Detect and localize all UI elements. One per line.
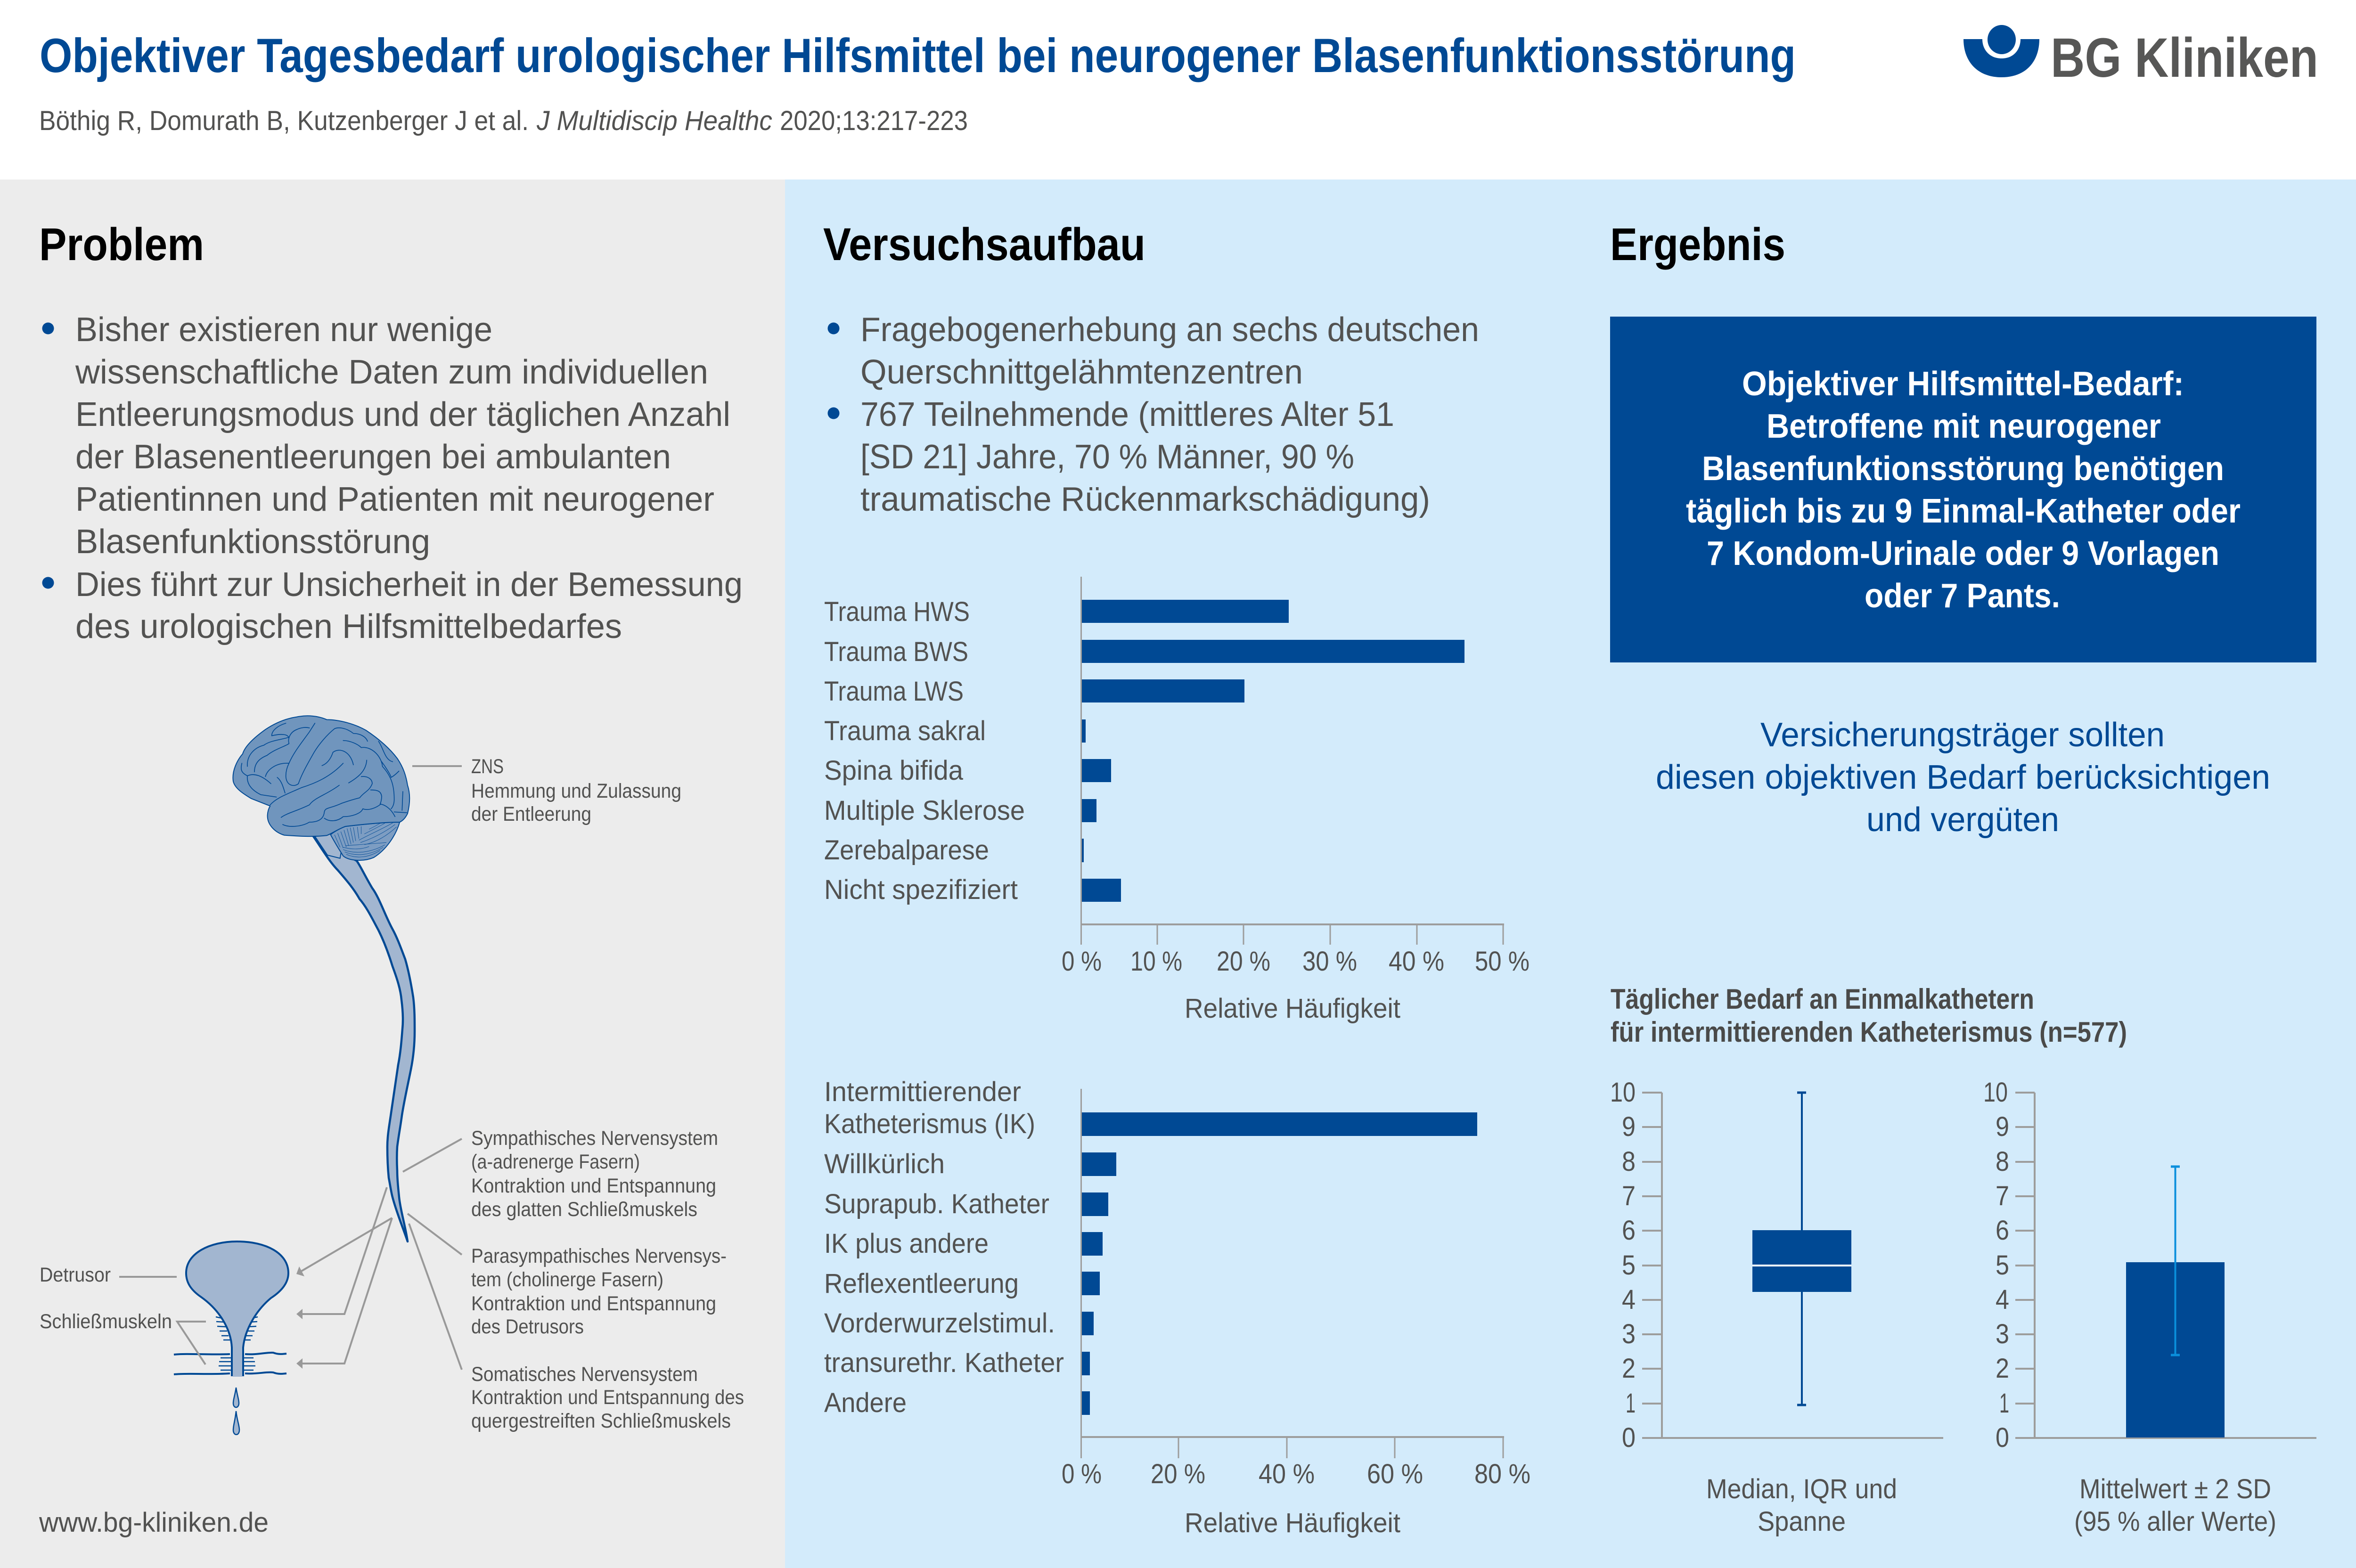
label: Schließmuskeln [40,1310,206,1364]
bar chart: emptying mode: 40 % [1259,1459,1315,1489]
box plot: median, IQR, range: 6 [1622,1215,1636,1246]
heading: Problem: Problem [39,219,204,270]
bar chart: cause: Zerebalparese [824,835,989,866]
bar chart: mean and SD: (95 % aller Werte) [2074,1506,2276,1537]
citation [39,106,968,136]
bullet text: problem: wissenschaftliche Daten zum individuellen [75,353,708,391]
label: Somatisches Nervensystem [409,1224,744,1432]
citation: J Multidiscip Healthc [536,106,772,136]
callout: result box: oder 7 Pants. [1865,577,2060,615]
label: Somatisches Nervensystem: Kontraktion und Entspannung des [471,1386,744,1409]
bar chart: cause: Multiple Sklerose [824,795,1025,826]
bar chart: emptying mode: Relative Häufigkeit [1185,1508,1400,1538]
bar chart: emptying mode: 20 % [1151,1459,1205,1489]
icon: drops [233,1388,239,1435]
bar chart: mean and SD: 9 [1996,1111,2009,1142]
label: Sympathisches Nervensystem: (a-adrenerge Fasern) [471,1151,640,1173]
logo: BG Kliniken [1963,25,2318,89]
recommendation text [1656,716,2270,839]
citation: Böthig R, Domurath B, Kutzenberger J et al. [39,106,529,136]
label: Parasympathisches Nervensystem: tem (cholinerge Fasern) [471,1268,663,1291]
label: Somatisches Nervensystem: quergestreiften Schließmuskels [471,1410,731,1432]
bar chart: emptying mode: IK plus andere [824,1228,989,1259]
label: Parasympathisches Nervensystem: Kontraktion und Entspannung [471,1292,716,1315]
bullet text: problem: Bisher existieren nur wenige [75,311,492,349]
bar chart: cause: 30 % [1302,946,1357,977]
box plot: median, IQR, range: 1 [1626,1388,1636,1419]
bullet text: setup: 767 Teilnehmende (mittleres Alter 51 [860,396,1394,433]
bar chart: mean and SD: 2 [1996,1353,2009,1384]
bar chart: cause: 50 % [1475,946,1530,977]
label: Schließmuskeln: Schließmuskeln [40,1310,172,1333]
bullet text: setup [827,311,1479,518]
box plot: median, IQR, range: 7 [1622,1181,1636,1211]
label: ZNS [412,755,681,825]
bar chart: mean and SD: 4 [1996,1284,2009,1315]
arrows: nerves to bladder [296,1187,392,1369]
bullet text: problem: Entleerungsmodus und der täglichen Anzahl [75,396,730,433]
label: Parasympathisches Nervensystem: des Detrusors [471,1315,584,1338]
icon: bladder [174,1241,288,1435]
bar chart: cause: Trauma HWS [824,596,970,627]
bar chart: cause: 40 % [1389,946,1444,977]
box plot: median, IQR, range: 0 [1622,1422,1636,1453]
box plot: median, IQR, range: Spanne [1758,1506,1846,1537]
bar chart: mean and SD: 1 [1999,1388,2009,1419]
box plot: median, IQR, range [1610,1077,1943,1537]
bar chart: emptying mode: Suprapub. Katheter [824,1189,1049,1219]
box plot: median, IQR, range: 10 [1610,1077,1636,1108]
label: Detrusor: Detrusor [40,1264,111,1286]
label: Sympathisches Nervensystem: Kontraktion und Entspannung [471,1175,716,1197]
bar chart: emptying mode: Intermittierender [824,1077,1021,1107]
bar chart: emptying mode: Reflexentleerung [824,1268,1019,1299]
bullet text: problem: der Blasenentleerungen bei ambulanten [75,438,671,476]
bullet text: problem: Patientinnen und Patienten mit neurogener [75,481,714,518]
bar chart: emptying mode: 0 % [1062,1459,1102,1489]
illustration: nervous system and bladder [40,716,744,1435]
box plot: median, IQR, range: 8 [1622,1146,1636,1177]
box plot: median, IQR, range: 3 [1622,1319,1636,1349]
label: Somatisches Nervensystem: Somatisches Nervensystem [471,1363,698,1386]
bar chart: mean and SD: 8 [1996,1146,2009,1177]
bullet text: setup: [SD 21] Jahre, 70 % Männer, 90 % [860,438,1354,476]
callout: result box: Blasenfunktionsstörung benötigen [1702,450,2224,488]
bar chart: cause [824,577,1530,1024]
bar chart: mean and SD: 6 [1996,1215,2009,1246]
label: ZNS: ZNS [471,755,504,778]
label: Sympathisches Nervensystem: des glatten Schließmuskels [471,1198,697,1221]
heading: Versuchsaufbau: Versuchsaufbau [823,219,1145,270]
recommendation text: diesen objektiven Bedarf berücksichtigen [1656,759,2270,796]
box plot: median, IQR, range: 5 [1622,1250,1636,1281]
recommendation text: und vergüten [1866,801,2059,839]
bar chart: mean and SD: 3 [1996,1319,2009,1349]
bar chart: emptying mode [824,1077,1530,1538]
bar chart: mean and SD: 0 [1996,1422,2009,1453]
chart title [1611,983,2127,1048]
callout: result box [1610,317,2316,662]
bar chart: mean and SD: 10 [1983,1077,2008,1108]
bullet text: problem: Blasenfunktionsstörung [75,523,430,561]
bar chart: emptying mode: 80 % [1474,1459,1530,1489]
website: www.bg-kliniken.de [39,1507,269,1538]
label: Sympathisches Nervensystem [403,1127,718,1221]
bullet text: setup: Fragebogenerhebung an sechs deutschen [860,311,1479,349]
bar chart: cause: Relative Häufigkeit [1185,993,1400,1024]
box plot: median, IQR, range: 9 [1622,1111,1636,1142]
bar chart: cause: 0 % [1062,946,1102,977]
bar chart: mean and SD [1983,1077,2316,1537]
panel: Problem [0,180,785,1568]
bar chart: emptying mode: transurethr. Katheter [824,1348,1064,1378]
bar chart: emptying mode: Katheterismus (IK) [824,1109,1035,1139]
icon: spinal cord [313,836,415,1241]
icon: brain [233,716,409,860]
label: Sympathisches Nervensystem: Sympathisches Nervensystem [471,1127,718,1150]
bar chart: cause: Trauma BWS [824,637,968,667]
bar chart: emptying mode: Willkürlich [824,1149,945,1179]
header [0,0,2356,180]
panel: Ergebnis [1593,180,2356,1568]
bar chart: emptying mode: Vorderwurzelstimul. [824,1308,1055,1339]
bullet text: setup: Querschnittgelähmtenzentren [860,353,1303,391]
bar chart: emptying mode: 60 % [1367,1459,1423,1489]
bar chart: cause: 20 % [1217,946,1270,977]
box plot: median, IQR, range: 2 [1622,1353,1636,1384]
bullet text: problem: des urologischen Hilfsmittelbedarfes [75,608,622,645]
bar chart: mean and SD: 5 [1996,1250,2009,1281]
bar chart: mean and SD: 7 [1996,1181,2009,1211]
box plot: median, IQR, range: Median, IQR und [1706,1474,1897,1504]
bullet text: problem: Dies führt zur Unsicherheit in der Bemessung [75,566,743,604]
heading: Ergebnis: Ergebnis [1610,219,1785,270]
chart title: für intermittierenden Katheterismus (n=577) [1611,1016,2127,1048]
bar chart: cause: Trauma LWS [824,676,964,707]
callout: result box: Betroffene mit neurogener [1767,408,2161,445]
bar chart: mean and SD: Mittelwert ± 2 SD [2079,1474,2271,1504]
title: Objektiver Tagesbedarf urologischer Hilfsmittel bei neurogener Blasenfunktionsstörung [40,29,1796,82]
bar chart: cause: Nicht spezifiziert [824,874,1018,905]
bullet text: setup: traumatische Rückenmarkschädigung) [860,481,1430,518]
label: Parasympathisches Nervensystem [408,1214,727,1338]
label: Parasympathisches Nervensystem: Parasympathisches Nervensys- [471,1245,727,1267]
callout: result box: 7 Kondom-Urinale oder 9 Vorlagen [1707,535,2219,572]
bar chart: cause: Spina bifida [824,755,964,786]
box plot: median, IQR, range: 4 [1622,1284,1636,1315]
panel: Versuchsaufbau [785,180,1593,1568]
bullet text: problem [42,311,743,645]
label: ZNS: der Entleerung [471,803,591,825]
callout: result box: Objektiver Hilfsmittel-Bedarf: [1742,365,2184,403]
bar chart: cause: Trauma sakral [824,716,986,746]
citation: 2020;13:217-223 [780,106,968,136]
bar chart: cause: 10 % [1130,946,1182,977]
callout: result box: täglich bis zu 9 Einmal-Katheter oder [1686,492,2241,530]
bar chart: emptying mode: Andere [824,1388,907,1418]
chart title: Täglicher Bedarf an Einmalkathetern [1611,983,2034,1015]
recommendation text: Versicherungsträger sollten [1760,716,2165,754]
label: ZNS: Hemmung und Zulassung [471,780,681,802]
